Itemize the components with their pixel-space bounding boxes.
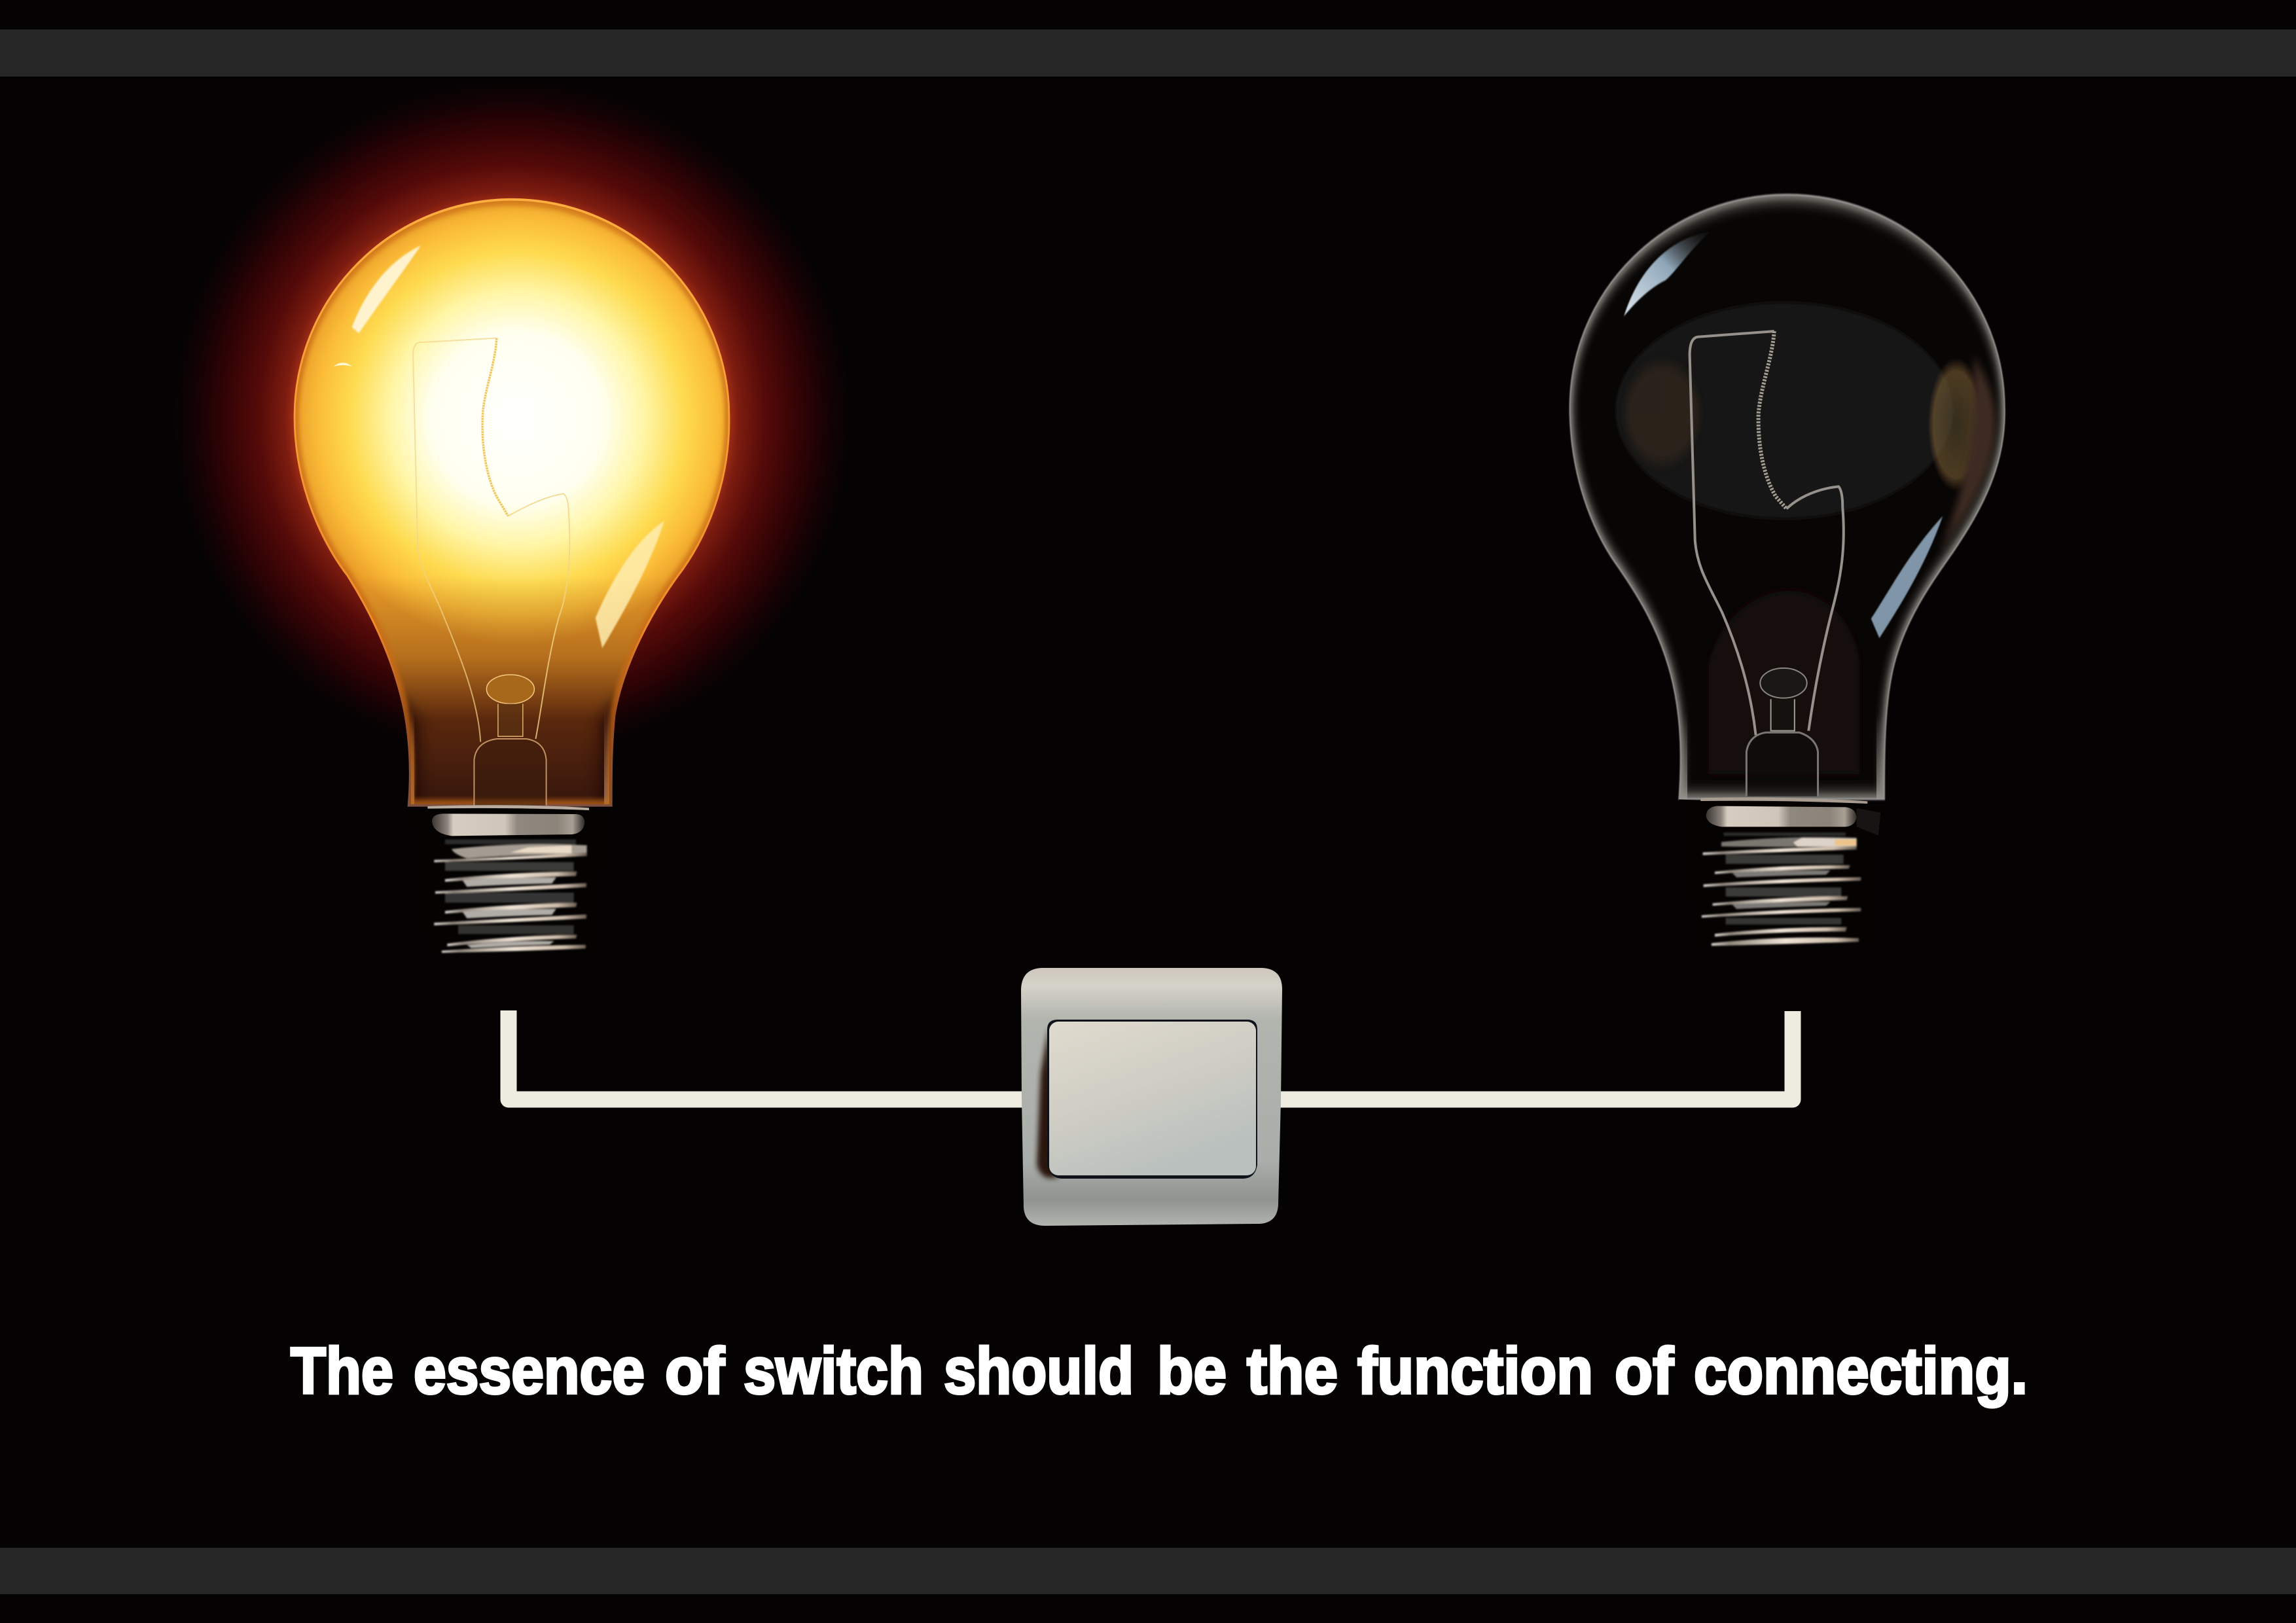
rocker shadow: [1037, 1027, 1057, 1178]
slogan: should: [944, 1334, 1134, 1408]
screw base: [408, 805, 611, 954]
rocker button: [1049, 1022, 1256, 1175]
dark glass bulb: [1558, 183, 2016, 805]
slogan: of: [665, 1334, 725, 1408]
screw base: [1679, 797, 1887, 947]
thread bands: [1702, 832, 1861, 946]
top bar: [0, 29, 2296, 77]
slogan: The: [291, 1334, 393, 1408]
bulb rim: [1570, 194, 2005, 799]
slogan: of: [1615, 1334, 1674, 1408]
icon: unlit light bulb: [1558, 183, 2016, 947]
slogan: function: [1357, 1334, 1593, 1408]
wire: right connection: [1280, 1011, 1793, 1099]
slogan: essence: [414, 1334, 645, 1408]
wire: left connection: [509, 1010, 1024, 1099]
switch plate: [1021, 968, 1282, 1226]
red glow halo: [173, 80, 851, 758]
thread bands: [434, 840, 587, 953]
filament and supports: [413, 338, 569, 806]
icon: wall switch: [1021, 968, 1282, 1226]
slogan: switch: [744, 1334, 924, 1408]
icon: lit light bulb: [173, 80, 851, 954]
slogan: the: [1247, 1334, 1338, 1408]
slogan: connecting.: [1694, 1334, 2028, 1408]
bottom bar: [0, 1548, 2296, 1594]
filament and supports: [1690, 331, 1844, 796]
lit glass bulb: [281, 190, 740, 812]
slogan: be: [1157, 1334, 1227, 1408]
rocker recess: [1047, 1020, 1257, 1179]
bulb rim: [295, 200, 729, 806]
